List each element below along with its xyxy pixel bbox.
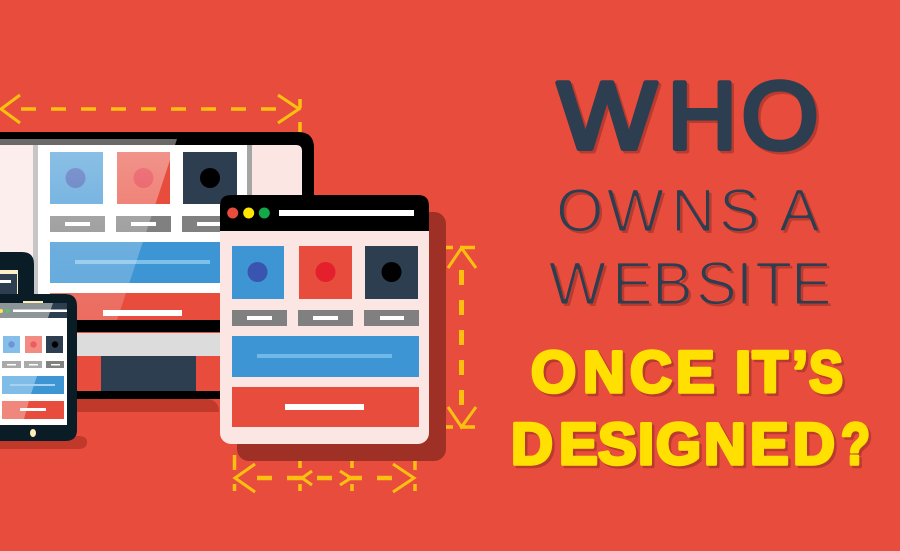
tablet tiles	[3, 336, 63, 353]
WHO letters: O	[742, 62, 818, 170]
tablet screen	[0, 318, 67, 425]
title: WEBSITE: WEBSITE	[548, 250, 832, 318]
monitor	[0, 132, 314, 412]
WHO letters	[558, 62, 818, 170]
window title bar	[220, 195, 429, 231]
title: WHO	[558, 62, 821, 172]
infographic canvas	[0, 79, 872, 494]
DESIGNED? shadow: DESIGNED	[514, 414, 837, 480]
height dimension arrow	[446, 248, 476, 427]
ONCE IT'S letters: S	[809, 340, 843, 405]
top width dimension arrow	[1, 95, 300, 132]
ONCE IT'S letters: ONCE IT’	[531, 340, 808, 405]
window shadow	[237, 212, 446, 461]
monitor grey buttons	[50, 216, 222, 232]
window blue banner	[232, 336, 419, 377]
WHO shadow: H	[670, 65, 739, 172]
phone screen	[0, 270, 18, 294]
window body	[220, 195, 429, 444]
monitor stand	[101, 356, 196, 391]
tablet body	[0, 294, 77, 441]
phone body	[0, 252, 34, 300]
title: OWNS A: OWNS A	[556, 176, 820, 244]
WHO shadow: W	[560, 65, 659, 172]
DESIGNED? letters: DESIGNED	[511, 412, 835, 477]
tablet speaker	[23, 301, 43, 304]
monitor base	[60, 391, 222, 399]
window image tiles	[232, 246, 418, 299]
browser window	[220, 195, 446, 461]
title: DESIGNED?	[511, 412, 872, 480]
title: ONCE IT'S	[531, 340, 846, 408]
monitor page column	[33, 145, 252, 320]
monitor chin	[0, 333, 222, 356]
tablet home button	[30, 429, 36, 437]
tablet shadow	[0, 436, 87, 449]
bottom dimension arrows	[234, 455, 415, 492]
monitor frame	[0, 132, 314, 332]
ONCE IT'S shadow: ONCE IT’	[534, 342, 811, 408]
tablet blue banner	[2, 376, 64, 394]
monitor left margin	[0, 145, 38, 320]
tablet	[0, 294, 87, 449]
monitor shadow	[70, 399, 219, 412]
ONCE IT'S shadow: S	[812, 342, 846, 408]
DESIGNED? letters: ?	[841, 412, 870, 477]
WHO shadow: O	[744, 65, 821, 172]
tablet browser bar	[0, 303, 67, 318]
tablet red banner	[2, 401, 64, 419]
monitor glare	[0, 139, 177, 320]
WHO letters: W	[558, 62, 657, 170]
monitor blue banner	[50, 242, 222, 283]
monitor screen	[0, 145, 302, 320]
WHO shadow	[560, 65, 821, 172]
WHO letters: H	[668, 62, 737, 170]
phone	[0, 252, 34, 300]
tablet grey buttons	[2, 361, 64, 368]
monitor red banner	[50, 293, 222, 320]
window red banner	[232, 387, 419, 427]
DESIGNED? shadow: ?	[844, 414, 872, 480]
monitor image tiles	[50, 152, 237, 204]
window grey buttons	[232, 310, 419, 326]
